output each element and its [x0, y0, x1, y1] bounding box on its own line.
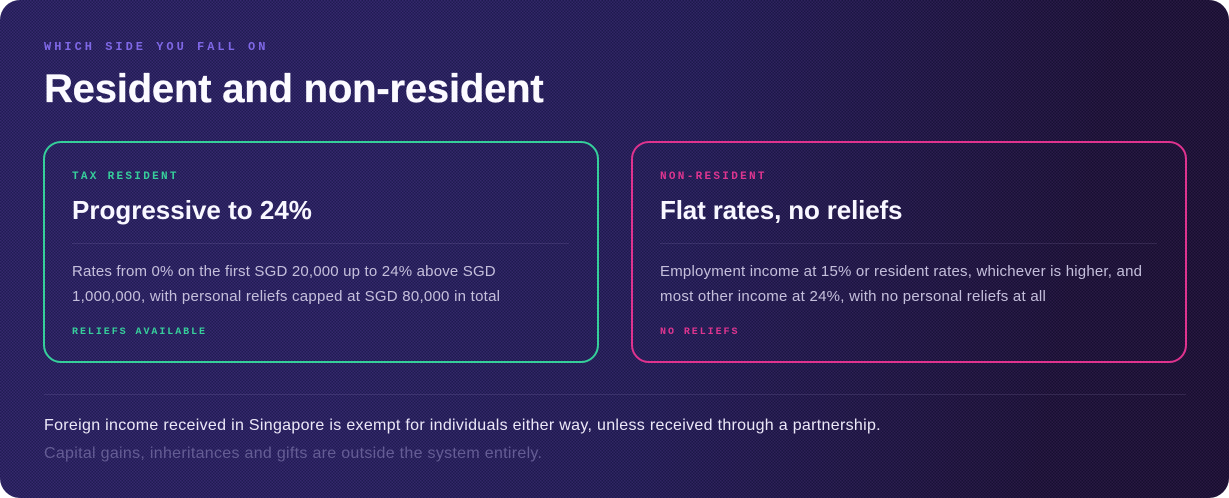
- resident description: [72, 262, 500, 304]
- panel: tax resident: [43, 141, 599, 363]
- resident tag: RELIEFS AVAILABLE: [72, 327, 207, 338]
- footnote primary: Foreign income received in Singapore is exempt for individuals either way, unless received through a partnership.: [44, 417, 881, 434]
- non-resident description: Employment income at 15% or resident rates, whichever is higher, and: [660, 262, 1142, 280]
- non-resident description: [660, 262, 1142, 304]
- resident heading: Progressive to 24%: [72, 194, 312, 224]
- non-resident tag: NO RELIEFS: [660, 327, 739, 338]
- title: Resident and non-resident: [44, 67, 544, 111]
- eyebrow label: WHICH SIDE YOU FALL ON: [44, 40, 268, 54]
- resident description: 1,000,000, with personal reliefs capped at SGD 80,000 in total: [72, 288, 500, 304]
- non-resident description: most other income at 24%, with no personal reliefs at all: [660, 288, 1046, 304]
- non-resident heading: Flat rates, no reliefs: [660, 194, 902, 224]
- resident label: TAX RESIDENT: [72, 170, 179, 182]
- panel: non-resident: [631, 141, 1187, 363]
- non-resident label: NON-RESIDENT: [660, 170, 767, 182]
- resident description: Rates from 0% on the first SGD 20,000 up to 24% above SGD: [72, 262, 496, 280]
- footnote secondary: Capital gains, inheritances and gifts are outside the system entirely.: [44, 445, 542, 462]
